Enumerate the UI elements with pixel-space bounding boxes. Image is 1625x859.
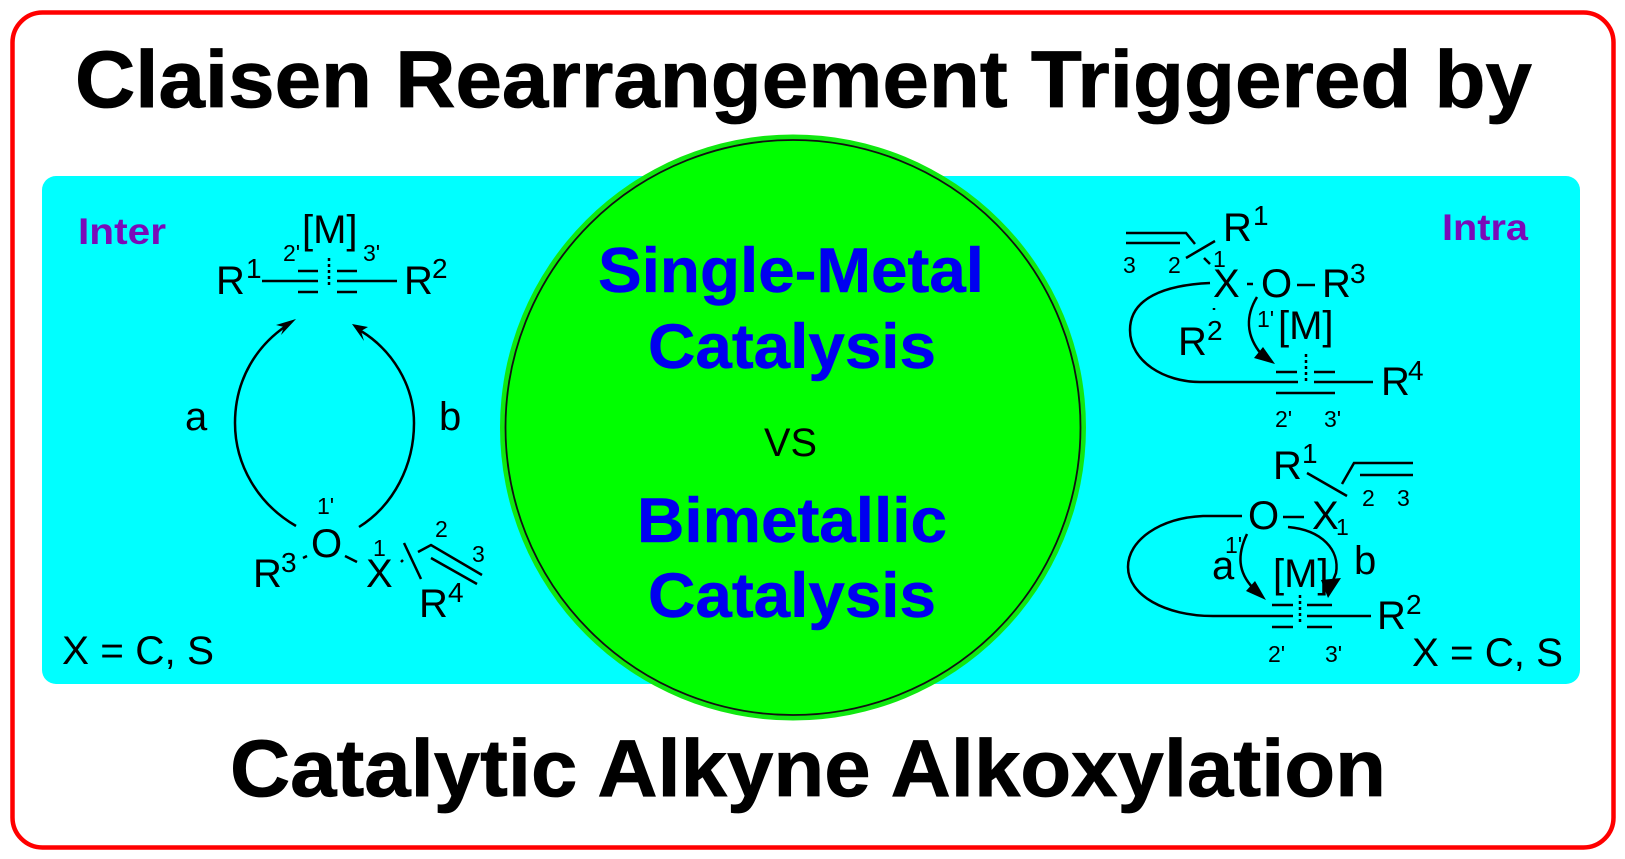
note: X = C, S right: X = C, S [1412,631,1563,675]
allyl ether substrate: 1 [373,535,386,561]
intramolecular scheme top [1123,200,1424,432]
intramolecular scheme bottom: a [1212,544,1235,588]
allyl ether substrate: 1' [317,493,334,519]
intramolecular scheme top: 1' [1257,306,1274,332]
intramolecular scheme top: R [1223,206,1252,250]
intramolecular scheme bottom: 3' [1325,641,1342,667]
title line 1: Claisen Rearrangement Triggered by [75,35,1532,125]
allyl ether substrate: 4 [448,577,464,608]
intramolecular scheme bottom: R [1273,444,1302,488]
path labels: b [439,395,461,439]
intramolecular scheme top: 1 [1213,246,1226,272]
label: Intra: Intra [1442,207,1528,248]
intramolecular scheme bottom: 2' [1268,641,1285,667]
alkyne with metal: [M] [302,208,358,252]
alkyne with metal: 1 [246,253,262,284]
intramolecular scheme top: 1 [1253,200,1269,231]
allyl ether substrate: R [253,552,282,596]
intramolecular scheme bottom: b [1354,539,1376,583]
central text: Bimetallic [637,486,947,556]
alkyne with metal: 2' [283,240,300,266]
intramolecular scheme bottom: 1' [1225,532,1242,558]
cyan panel [42,176,1580,684]
central green circle [500,134,1086,720]
intramolecular scheme top: 2' [1275,406,1292,432]
alkyne with metal: R [216,259,245,303]
central text [598,236,984,631]
central text: Single-Metal [598,236,984,306]
note: X = C, S left: X = C, S [62,629,214,673]
alkyne [1276,372,1373,393]
central text: Catalysis [648,561,936,631]
intramolecular scheme top: 2 [1207,315,1223,346]
intramolecular scheme bottom: 1 [1302,438,1318,469]
allyl ether substrate: O [311,522,342,566]
allyl ether substrate: R [419,582,448,626]
intramolecular scheme top: 2 [1168,252,1181,278]
intermolecular scheme [185,208,485,626]
intramolecular scheme bottom: 3 [1397,485,1410,511]
arrow a [1240,534,1266,600]
arrow b [1288,527,1341,598]
label: Inter: Inter [78,211,166,252]
central text: VS [764,421,817,465]
alkyne with metal: R [404,259,433,303]
intramolecular scheme top: 3' [1324,406,1341,432]
allyl ether substrate [253,493,485,626]
intramolecular scheme top: R [1178,320,1207,364]
allyl ether substrate: X [366,552,393,596]
intramolecular scheme bottom: O [1248,494,1279,538]
alkyne with metal: 2 [432,253,448,284]
path labels: a [185,395,208,439]
title line 2: Catalytic Alkyne Alkoxylation [230,724,1386,814]
alkyne with metal: 3' [363,240,380,266]
allyl ether substrate: 2 [435,516,448,542]
intramolecular scheme top: 3 [1350,258,1366,289]
path labels [185,395,461,439]
intramolecular scheme top: R [1322,262,1351,306]
intramolecular scheme bottom: R [1377,594,1406,638]
tether loop [1128,516,1293,616]
intramolecular scheme bottom: 2 [1362,485,1375,511]
intramolecular scheme bottom: 2 [1406,589,1422,620]
central text: Catalysis [648,312,936,382]
intramolecular scheme top: X [1213,262,1240,306]
tether loop [1130,283,1298,382]
allyl ether substrate: 3 [472,541,485,567]
intramolecular scheme top: R [1381,360,1410,404]
arrow b [352,324,414,527]
alkyne with metal [216,208,448,303]
intramolecular scheme top: 3 [1123,252,1136,278]
alkyne [1272,605,1371,627]
intramolecular scheme bottom: X [1312,494,1339,538]
intramolecular scheme bottom [1128,438,1422,667]
intramolecular scheme bottom: [M] [1273,552,1329,596]
arrow a [235,319,296,526]
allyl ether substrate: 3 [281,547,297,578]
arrow [1249,297,1275,364]
intramolecular scheme top: [M] [1278,304,1334,348]
intramolecular scheme bottom: 1 [1336,514,1349,540]
intramolecular scheme top: O [1261,262,1292,306]
intramolecular scheme top: 4 [1408,355,1424,386]
